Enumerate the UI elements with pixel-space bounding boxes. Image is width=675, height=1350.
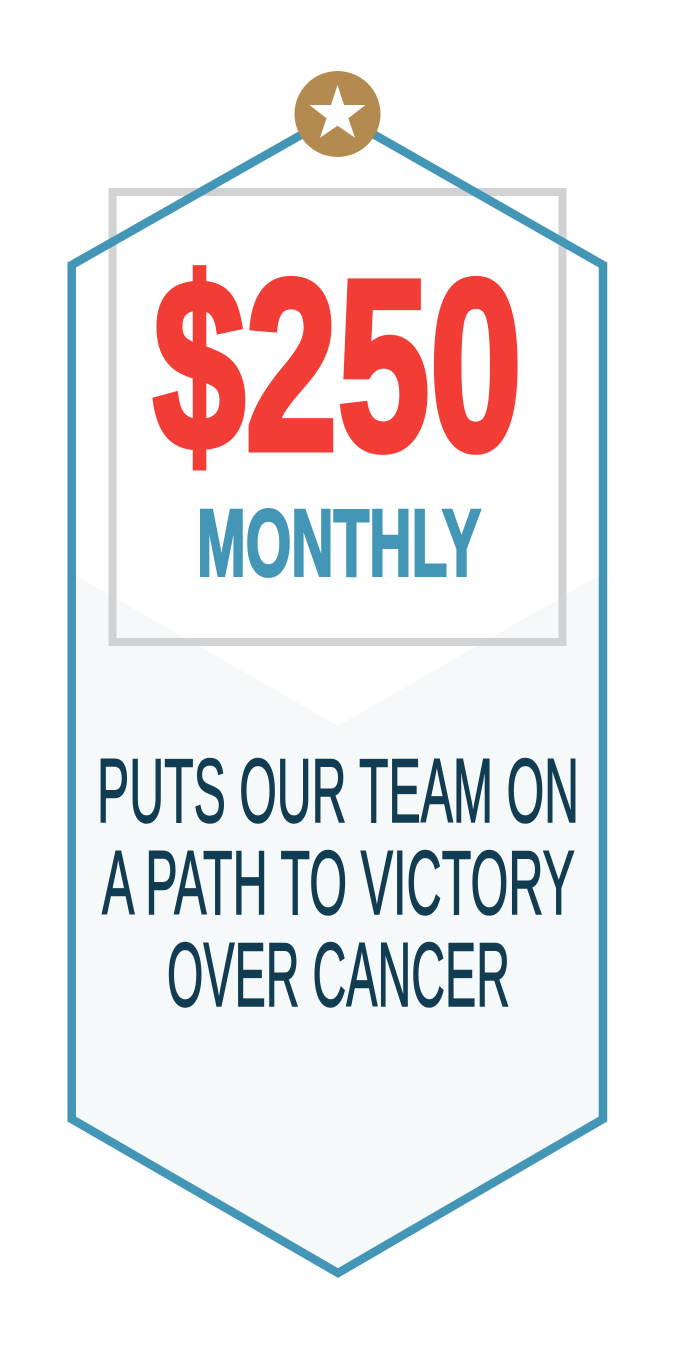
heading: monthly: MONTHLY — [197, 490, 481, 596]
text block: description — [97, 741, 579, 1026]
panel: grey square frame — [112, 192, 562, 642]
panel: pale lower chevron fill — [75, 575, 600, 1269]
icon: gold star medallion — [294, 71, 380, 157]
panel: hexagon outline — [72, 114, 603, 1273]
